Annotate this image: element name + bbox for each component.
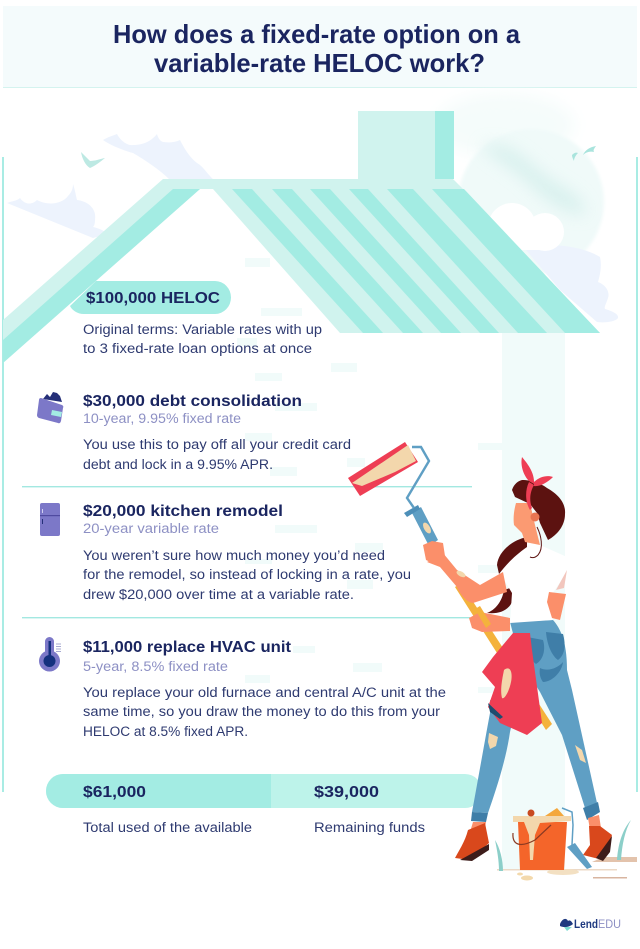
section: debt consolidation: $30,000 debt consolidation bbox=[83, 393, 302, 410]
jeans cuffs bbox=[471, 802, 600, 822]
jeans and right leg bbox=[510, 620, 597, 808]
birds bbox=[81, 146, 596, 168]
original terms text: to 3 fixed-rate loan options at once bbox=[83, 341, 312, 356]
section: debt consolidation: debt and lock in a 9.95% APR. bbox=[83, 457, 273, 472]
section: kitchen remodel: $20,000 kitchen remodel bbox=[83, 503, 283, 520]
totals labels: Remaining funds bbox=[314, 820, 425, 835]
hair strand bbox=[530, 527, 541, 558]
roller wire bbox=[407, 447, 429, 508]
paint pole bbox=[455, 583, 552, 730]
shoe soles bbox=[460, 836, 612, 861]
title: How does a fixed-rate option on a bbox=[113, 19, 521, 49]
bandana bbox=[521, 457, 553, 510]
section: HVAC unit: same time, so you draw the money to do this from your bbox=[83, 704, 441, 719]
section: HVAC unit bbox=[39, 637, 446, 739]
wall column bbox=[502, 333, 565, 870]
side walls bbox=[2, 157, 638, 792]
right roof slope bbox=[163, 179, 600, 333]
ankles bbox=[470, 815, 601, 832]
section: HVAC unit: 5-year, 8.5% fixed rate bbox=[83, 659, 228, 674]
roller handle bbox=[412, 507, 438, 546]
arm paint spot bbox=[455, 569, 467, 579]
bricks bbox=[237, 258, 502, 693]
section: kitchen remodel: drew $20,000 over time at a variable rate. bbox=[83, 587, 354, 602]
ground bbox=[497, 857, 637, 880]
ear bbox=[530, 512, 540, 522]
section: debt consolidation bbox=[37, 392, 351, 472]
raised arm bbox=[427, 553, 507, 603]
left leg stain bbox=[488, 733, 498, 749]
title: variable-rate HELOC work? bbox=[154, 48, 485, 78]
totals bar bbox=[46, 774, 482, 808]
icon: fridge bbox=[40, 503, 60, 536]
title bbox=[113, 19, 521, 78]
section: kitchen remodel: for the remodel, so instead of locking in a rate, you bbox=[83, 567, 411, 582]
original terms text: Original terms: Variable rates with up bbox=[83, 322, 322, 337]
upper ponytail bbox=[497, 537, 527, 574]
painter illustration bbox=[348, 442, 637, 880]
section: kitchen remodel bbox=[40, 503, 411, 602]
paint roller bbox=[348, 442, 418, 496]
left shoe bbox=[455, 823, 489, 860]
section: HVAC unit: HELOC at 8.5% fixed APR. bbox=[83, 724, 248, 739]
LendEDU logo: EDU bbox=[598, 917, 621, 931]
totals bar: $39,000 bbox=[314, 784, 379, 801]
title band bbox=[3, 6, 637, 88]
chimney bbox=[358, 111, 454, 179]
section: HVAC unit: $11,000 replace HVAC unit bbox=[83, 639, 291, 656]
roof bbox=[3, 179, 600, 363]
totals bar: $61,000 bbox=[83, 784, 146, 801]
small roller bbox=[562, 808, 592, 869]
jeans pockets bbox=[527, 632, 565, 682]
HELOC pill bbox=[70, 281, 231, 314]
right shoe bbox=[583, 826, 612, 860]
HELOC pill: $100,000 HELOC bbox=[86, 290, 220, 307]
icon: wallet bbox=[37, 392, 63, 423]
lower arm and hand bbox=[469, 612, 510, 632]
white cloud bbox=[488, 203, 564, 251]
LendEDU logo bbox=[560, 917, 621, 931]
shirt bbox=[500, 537, 567, 623]
section: kitchen remodel: 20-year variable rate bbox=[83, 521, 219, 536]
totals labels bbox=[83, 820, 425, 835]
bucket bbox=[513, 808, 571, 870]
handle paint bbox=[421, 521, 433, 535]
section: kitchen remodel: You weren’t sure how much money you’d need bbox=[83, 548, 385, 563]
red cloth bbox=[482, 633, 542, 735]
pole over hand bbox=[475, 606, 491, 628]
lower ponytail bbox=[487, 588, 513, 613]
section: HVAC unit: You replace your old furnace and central A/C unit at the bbox=[83, 685, 446, 700]
hair bbox=[512, 480, 565, 540]
left leg bbox=[472, 700, 515, 813]
section: debt consolidation: 10-year, 9.95% fixed rate bbox=[83, 411, 241, 426]
hand bbox=[423, 541, 445, 565]
grass bbox=[495, 820, 631, 871]
hip arm bbox=[547, 592, 566, 620]
sky background bbox=[7, 93, 618, 322]
right leg stain bbox=[575, 745, 586, 763]
totals labels: Total used of the available bbox=[83, 820, 252, 835]
original terms text bbox=[83, 322, 322, 356]
LendEDU logo: Lend bbox=[574, 917, 598, 931]
shirt shadow bbox=[556, 570, 567, 590]
icon: thermometer bbox=[39, 637, 61, 672]
clouds bbox=[7, 134, 618, 322]
neck and face bbox=[514, 503, 540, 545]
left roof slope bbox=[3, 179, 214, 363]
roller collar bbox=[404, 505, 420, 517]
section: debt consolidation: You use this to pay off all your credit card bbox=[83, 437, 351, 452]
